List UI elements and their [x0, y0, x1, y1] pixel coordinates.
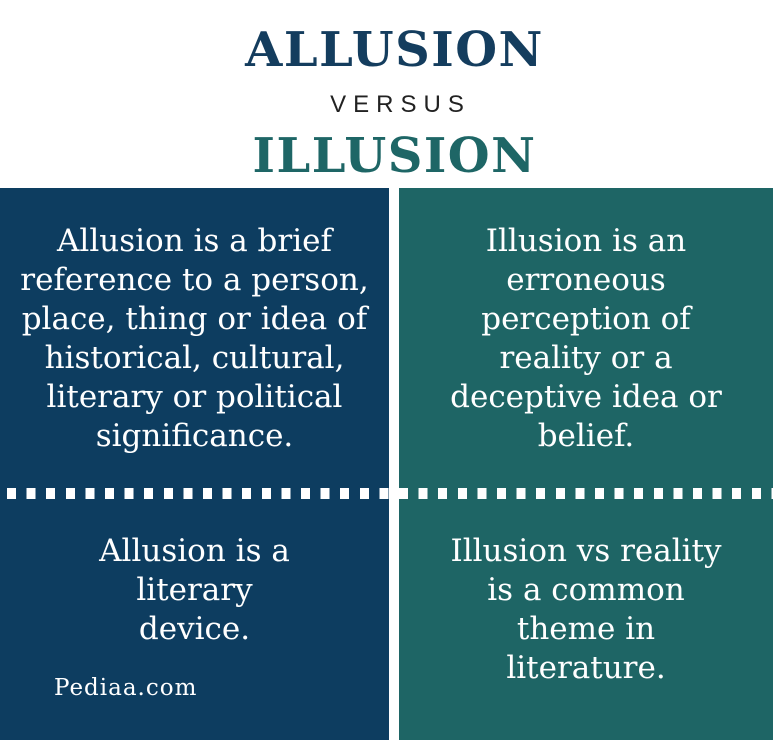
- text: allusion definition: historical, cultural,: [45, 340, 344, 376]
- text: illusion theme: is a common: [487, 572, 685, 608]
- text: illusion definition: [450, 223, 722, 454]
- text: illusion definition: reality or a: [499, 340, 673, 376]
- text: illusion theme: literature.: [506, 650, 666, 686]
- text: allusion definition: significance.: [96, 418, 293, 454]
- text: illusion theme: theme in: [517, 611, 655, 647]
- text: allusion definition: literary or political: [47, 379, 342, 415]
- panel: illusion: [399, 188, 773, 740]
- panel: allusion: [0, 188, 389, 740]
- text: illusion definition: Illusion is an: [486, 223, 686, 259]
- text: allusion device: device.: [139, 611, 250, 647]
- text: allusion definition: Allusion is a brief: [57, 223, 332, 259]
- title: illusion: ILLUSION: [252, 128, 536, 184]
- text: allusion definition: reference to a person,: [20, 262, 369, 298]
- title: versus: VERSUS: [330, 91, 471, 118]
- text: allusion definition: place, thing or idea of: [22, 301, 367, 337]
- text: illusion definition: deceptive idea or: [450, 379, 722, 415]
- text: illusion theme: Illusion vs reality: [450, 533, 722, 569]
- text: illusion theme: [450, 533, 722, 686]
- text: allusion device: Allusion is a: [99, 533, 290, 569]
- text: illusion definition: belief.: [538, 418, 634, 454]
- text: illusion definition: perception of: [481, 301, 691, 337]
- text: allusion device: [98, 533, 290, 647]
- logo: pediaa: Pediaa.com: [54, 675, 197, 701]
- text: allusion definition: [20, 223, 370, 454]
- text: allusion device: literary: [136, 572, 253, 608]
- title: allusion: ALLUSION: [245, 22, 544, 78]
- dotted divider: [7, 488, 773, 499]
- text: illusion definition: erroneous: [506, 262, 666, 298]
